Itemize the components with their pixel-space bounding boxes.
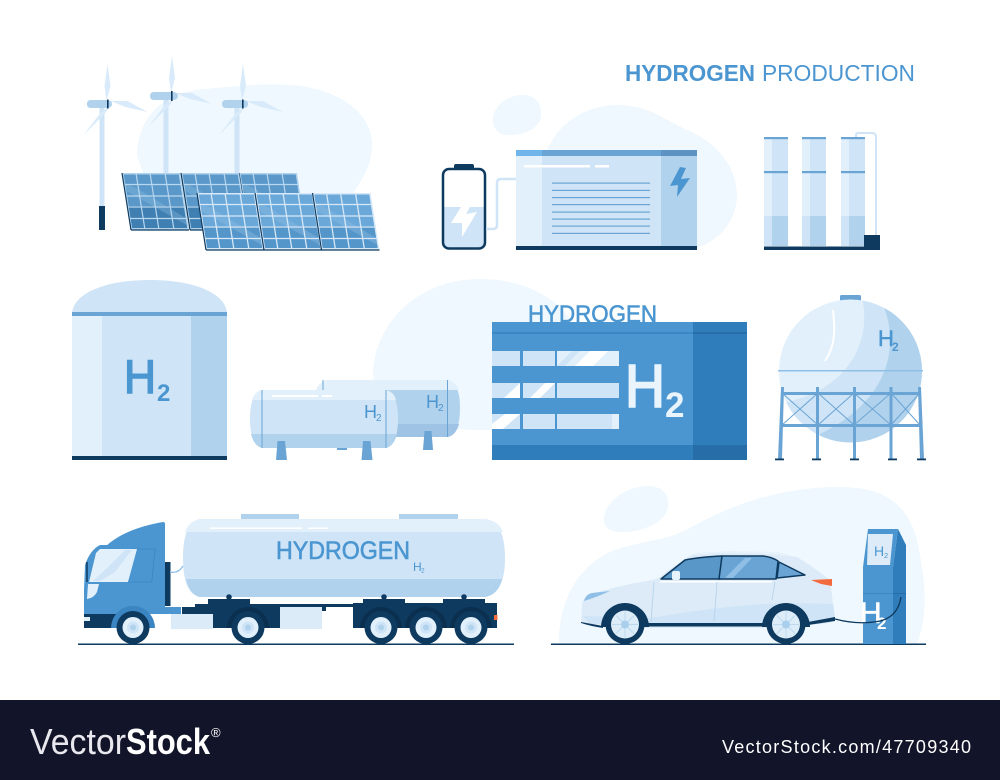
ground line <box>78 644 514 645</box>
background blob: storage <box>373 279 572 430</box>
fuel pump: 2 <box>877 614 886 633</box>
wheel arches <box>227 607 492 628</box>
footer image id: VectorStock.com/47709340 <box>722 737 971 757</box>
storage tank: large H2: 2 <box>157 380 170 407</box>
wind turbines <box>84 56 283 230</box>
windows <box>661 556 805 580</box>
icon: battery bolt <box>451 207 477 237</box>
spherical tank: H <box>878 326 894 351</box>
front tank: H <box>364 402 377 422</box>
battery <box>443 164 485 248</box>
front tank: 2 <box>376 413 382 424</box>
column 2 <box>802 137 826 246</box>
title: PRODUCTION <box>762 60 915 86</box>
spherical tank: 2 <box>892 340 899 354</box>
large H2: H <box>860 597 882 630</box>
background blob: small car <box>604 486 668 532</box>
tank: 2 <box>421 568 425 574</box>
background blob: car <box>559 487 925 644</box>
ground line <box>551 644 926 645</box>
title <box>625 60 915 86</box>
car body <box>581 551 835 644</box>
footer logo: Stock <box>126 721 211 762</box>
turbine 3 <box>219 64 283 175</box>
truck cab <box>84 522 181 628</box>
footer band <box>0 700 1000 780</box>
fuel pump <box>860 529 906 644</box>
underbody <box>640 623 770 626</box>
background blob: renewable energy <box>137 84 372 195</box>
taillight <box>811 579 832 586</box>
battery cable <box>486 179 516 229</box>
icon: lightning bolt <box>670 167 690 197</box>
turbine 1 <box>84 64 148 230</box>
background blob: electrolyzer <box>547 105 737 248</box>
rear tank: H <box>426 392 439 412</box>
footer logo: ® <box>211 725 221 740</box>
separation columns <box>764 133 880 250</box>
trailer chassis <box>165 562 497 628</box>
hydrogen car at fuel pump <box>551 529 926 645</box>
fuel pump: H <box>874 543 884 559</box>
fuel pump: 2 <box>884 551 888 560</box>
building label: HYDROGEN <box>528 301 657 328</box>
toolboxes <box>171 607 322 629</box>
electrolyzer <box>516 150 697 250</box>
hydrogen building: 2 <box>665 386 684 425</box>
support frame <box>775 387 926 460</box>
hydrogen building <box>492 301 747 460</box>
background blob: small top <box>493 95 541 135</box>
footer logo: Vector <box>30 721 126 762</box>
column 1 <box>764 137 788 246</box>
front tank <box>250 390 398 460</box>
spherical tank <box>770 295 930 460</box>
column 3 <box>841 137 865 246</box>
windshield <box>89 549 137 582</box>
hydrogen building: H <box>625 353 665 420</box>
title: HYDROGEN <box>625 60 755 86</box>
tanker truck <box>78 514 514 645</box>
tank <box>183 514 505 597</box>
solar panels <box>122 173 380 250</box>
rear tank <box>315 380 460 450</box>
headlight <box>584 591 610 601</box>
pump screen <box>867 534 893 565</box>
horizontal tanks <box>250 380 460 460</box>
rear tank: 2 <box>438 403 444 414</box>
storage tank: large H2 <box>72 280 227 460</box>
truck wheels <box>116 611 488 644</box>
turbine 2 <box>148 56 212 175</box>
tank: HYDROGEN <box>276 537 410 565</box>
charging cable <box>835 597 901 623</box>
storage tank: large H2: H <box>124 350 156 403</box>
tank: H <box>413 560 422 574</box>
car wheels <box>606 605 806 644</box>
windows <box>492 351 619 429</box>
footer logo <box>30 721 221 762</box>
